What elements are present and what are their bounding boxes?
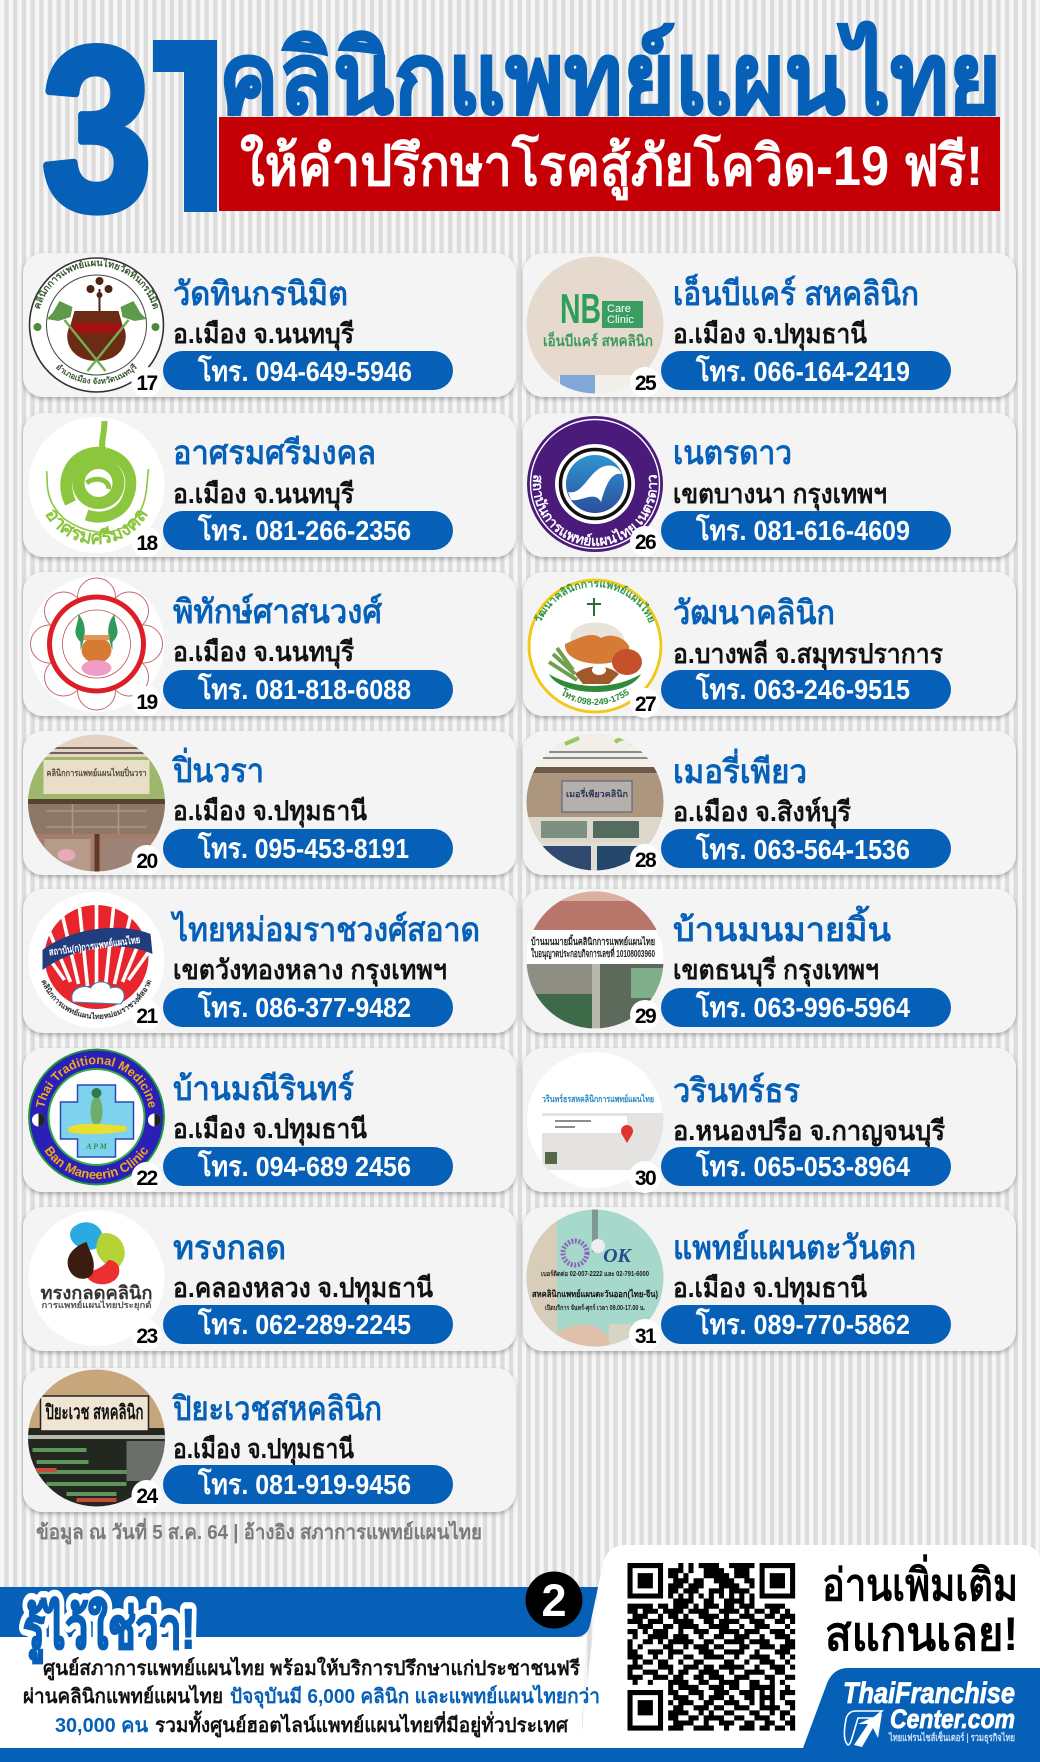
phone 21 xyxy=(163,988,453,1027)
badge 24: 24 xyxy=(136,1485,158,1508)
name 28: เมอรี่เพียว xyxy=(673,748,807,790)
phone 19 xyxy=(163,670,453,709)
phone 22 xyxy=(163,1147,453,1186)
badge 17: 17 xyxy=(136,372,157,395)
photo 24 xyxy=(28,1369,166,1510)
location 30: อ.หนองปรือ จ.กาญจนบุรี xyxy=(673,1116,945,1148)
logo 17: อำเภอเมือง จังหวัดนนทบุรี xyxy=(56,362,137,384)
phone 28: โทร. 063-564-1536 xyxy=(695,832,910,865)
badge 22: 22 xyxy=(136,1167,157,1190)
phone 26 xyxy=(661,511,951,550)
phone 29: โทร. 063-996-5964 xyxy=(695,990,910,1023)
photo 30: วรินทร์ธรสหคลินิกการแพทย์แผนไทย xyxy=(542,1093,654,1104)
body line 1: ศูนย์สภาการแพทย์แผนไทย พร้อมให้บริการปรึกษาแก่ประชาชนฟรี xyxy=(43,1656,580,1682)
name 23: ทรงกลด xyxy=(173,1229,286,1266)
phone 17 xyxy=(163,351,453,390)
name 29: บ้านมนมายมิ้น xyxy=(673,905,891,948)
phone 20 xyxy=(163,829,453,868)
red subtitle banner xyxy=(219,117,1000,211)
phone 18 xyxy=(163,511,453,550)
badge 25 xyxy=(630,367,660,397)
blue heading bar xyxy=(0,1587,598,1637)
body line 3: รวมทั้งศูนย์ฮอตไลน์แพทย์แผนไทยที่มีอยู่ทั่วประเทศ xyxy=(155,1710,569,1739)
title number 31: 3 xyxy=(42,0,152,259)
phone 24 xyxy=(163,1465,453,1504)
badge 2: 2 xyxy=(541,1575,567,1626)
phone 30 xyxy=(661,1147,951,1186)
name 20: ปิ่นวรา xyxy=(172,747,264,789)
body line 2: ปัจจุบันมี 6,000 คลินิก และแพทย์แผนไทยกว่า xyxy=(230,1684,600,1709)
logo 23: ทรงกลดคลินิก xyxy=(40,1283,153,1303)
icon: arrow xyxy=(844,1711,882,1747)
phone 25 xyxy=(661,351,951,390)
phone 18: โทร. 081-266-2356 xyxy=(197,513,411,546)
name 24: ปิยะเวชสหคลินิก xyxy=(172,1390,382,1427)
photo 24: ปิยะเวช สหคลินิก xyxy=(45,1402,144,1424)
name 19: พิทักษ์ศาสนวงศ์ xyxy=(173,593,383,630)
phone 25: โทร. 066-164-2419 xyxy=(695,354,910,387)
panel: clinic 18 xyxy=(20,412,518,562)
logo: ThaiFranchiseCenter xyxy=(803,1668,1040,1748)
badge 27: 27 xyxy=(635,693,656,716)
badge 30: 30 xyxy=(635,1167,656,1190)
panel: clinic 21 xyxy=(20,888,518,1038)
phone 30: โทร. 065-053-8964 xyxy=(695,1149,910,1182)
phone 24: โทร. 081-919-9456 xyxy=(197,1467,411,1500)
scan now heading: สแกนเลย! xyxy=(825,1607,1018,1660)
logo: ThaiFranchiseCenter: Center.com xyxy=(890,1704,1015,1734)
location 17: อ.เมือง จ.นนทบุรี xyxy=(173,319,354,351)
logo 21: สถาบัน(ก)การแพทย์แผนไทย xyxy=(48,933,141,958)
badge 21: 21 xyxy=(136,1005,158,1028)
photo 25: Clinic xyxy=(607,314,634,326)
photo 29 xyxy=(526,891,664,1030)
panel: clinic 28 xyxy=(523,731,1016,875)
logo 22: Ban Maneerin Clinic xyxy=(44,1146,148,1180)
bottom blue band xyxy=(0,1748,1040,1762)
panel: qr and scan prompt xyxy=(580,1545,1040,1748)
photo 25: NB xyxy=(560,285,601,332)
photo 31: สหคลินิกแพทย์แผนตะวันออก(ไทย-จีน) xyxy=(532,1288,658,1299)
body line 3: 30,000 คน xyxy=(55,1715,148,1737)
photo 28: เมอรี่เพียวคลินิก xyxy=(566,787,628,799)
logo 18: อาศรมศรีมงคล xyxy=(45,510,148,544)
location 28: อ.เมือง จ.สิงห์บุรี xyxy=(673,796,851,829)
body line 3 xyxy=(55,1710,569,1739)
location 23: อ.คลองหลวง จ.ปทุมธานี xyxy=(173,1273,433,1305)
location 21: เขตวังทองหลาง กรุงเทพฯ xyxy=(173,955,447,987)
photo 31 xyxy=(526,1209,664,1351)
logo 21 xyxy=(28,892,164,1030)
name 31: แพทย์แผนตะวันตก xyxy=(673,1229,916,1266)
name 18: อาศรมศรีมงคล xyxy=(173,434,376,471)
photo 31: เบอร์ติดต่อ 02-007-2222 และ 02-791-6000 xyxy=(541,1269,649,1278)
phone 22: โทร. 094-689 2456 xyxy=(197,1149,411,1182)
location 20: อ.เมือง จ.ปทุมธานี xyxy=(173,796,367,828)
QR code xyxy=(628,1566,795,1728)
location 24: อ.เมือง จ.ปทุมธานี xyxy=(173,1434,354,1466)
badge 27 xyxy=(630,688,660,718)
panel: clinic 20 xyxy=(23,731,516,875)
name 27: วัฒนาคลินิก xyxy=(673,594,835,631)
phone 26: โทร. 081-616-4609 xyxy=(695,513,910,546)
logo 19 xyxy=(28,576,164,716)
heading xyxy=(23,1596,195,1664)
name 21: ไทยหม่อมราชวงศ์สอาด xyxy=(170,910,480,948)
badge 28: 28 xyxy=(635,849,657,872)
logo 22: Thai Traditional Medicine xyxy=(36,1056,155,1108)
location 19: อ.เมือง จ.นนทบุรี xyxy=(173,637,354,669)
location 27: อ.บางพลี จ.สมุทรปราการ xyxy=(673,639,943,671)
phone 31 xyxy=(661,1305,951,1344)
location 18: อ.เมือง จ.นนทบุรี xyxy=(173,479,354,511)
body line 2 xyxy=(23,1684,600,1709)
panel: clinic 31 xyxy=(523,1207,1016,1351)
logo 27: โทร.098-249-1755 xyxy=(562,688,629,705)
panel: clinic 22 xyxy=(20,1048,518,1196)
badge 23: 23 xyxy=(136,1325,157,1348)
location 22: อ.เมือง จ.ปทุมธานี xyxy=(173,1114,367,1146)
location 26: เขตบางนา กรุงเทพฯ xyxy=(673,479,887,511)
logo 27: วัฒนาคลินิกการแพทย์แผนไทย xyxy=(534,581,655,623)
heading: รู้ไว้ใช่ว่า! xyxy=(23,1596,195,1664)
logo 26: สถาบันการแพทย์แผนไทย เนตรดาว xyxy=(532,475,658,546)
location 25: อ.เมือง จ.ปทุมธานี xyxy=(673,319,867,351)
badge 20 xyxy=(132,845,162,875)
photo 30 xyxy=(527,1052,664,1193)
badge 19: 19 xyxy=(136,691,157,714)
panel: clinic 23 xyxy=(23,1207,516,1351)
photo 31: เปิดบริการ จันทร์-ศุกร์ เวลา 09.00-17.00 น. xyxy=(545,1303,645,1312)
phone 28 xyxy=(661,829,951,868)
name 17: วัดทินกรนิมิต xyxy=(173,275,348,312)
logo 22: A P M xyxy=(85,1142,108,1151)
panel: clinic 27 xyxy=(520,572,1018,720)
phone 23 xyxy=(163,1305,453,1344)
body line 2: ผ่านคลินิกแพทย์แผนไทย xyxy=(23,1684,223,1708)
badge 18: 18 xyxy=(136,532,158,555)
name 30: วรินทร์ธร xyxy=(673,1072,800,1109)
text: 1 xyxy=(186,25,216,248)
red subtitle banner: ให้คำปรึกษาโรคสู้ภัยโควิด-19 ฟรี! xyxy=(240,133,983,201)
panel: clinic 30 xyxy=(523,1048,1016,1193)
logo 26 xyxy=(527,416,663,556)
logo 23: การแพทย์แผนไทยประยุกต์ xyxy=(42,1300,152,1311)
badge 20: 20 xyxy=(136,850,157,873)
panel: clinic 25 xyxy=(523,253,1016,397)
photo 25: เอ็นบีแคร์ สหคลินิก xyxy=(543,331,653,350)
name 25: เอ็นบีแคร์ สหคลินิก xyxy=(673,273,919,312)
photo 28 xyxy=(526,733,664,874)
badge 22 xyxy=(132,1162,162,1192)
panel: clinic 17 xyxy=(20,252,518,402)
badge 28 xyxy=(630,844,660,874)
logo 27 xyxy=(527,578,663,718)
phone 21: โทร. 086-377-9482 xyxy=(197,990,411,1023)
logo 21: คลินิกการแพทย์แผนไทยหม่อมราชวงศ์สอาด xyxy=(41,980,152,1020)
logo 18 xyxy=(28,417,164,557)
panel: clinic 19 xyxy=(23,572,516,716)
location 29: เขตธนบุรี กรุงเทพฯ xyxy=(673,955,879,987)
panel: clinic 26 xyxy=(520,412,1018,562)
badge 2 xyxy=(526,1572,582,1628)
badge 30 xyxy=(629,1161,661,1193)
panel: clinic 24 xyxy=(23,1368,516,1512)
photo 31: OK xyxy=(603,1245,633,1267)
badge 24 xyxy=(132,1480,162,1510)
photo 25 xyxy=(526,256,664,397)
location 31: อ.เมือง จ.ปทุมธานี xyxy=(673,1273,867,1305)
phone 29 xyxy=(661,988,951,1027)
badge 31: 31 xyxy=(635,1325,657,1348)
photo 29: บ้านมนมายมิ้นคลินิกการแพทย์แผนไทย xyxy=(531,934,655,948)
logo 17: คลินิกการแพทย์แผนไทยวัดทินกรนิมิต xyxy=(35,258,158,310)
badge 26: 26 xyxy=(635,531,656,554)
name 22: บ้านมณีรินทร์ xyxy=(173,1070,354,1107)
phone 23: โทร. 062-289-2245 xyxy=(197,1307,411,1340)
phone 20: โทร. 095-453-8191 xyxy=(197,831,409,864)
badge 31 xyxy=(629,1319,661,1351)
heading: รู้ไว้ใช่ว่า! xyxy=(23,1596,195,1664)
panel: clinic 29 xyxy=(523,889,1016,1033)
phone 19: โทร. 081-818-6088 xyxy=(197,672,411,705)
phone 31: โทร. 089-770-5862 xyxy=(695,1307,910,1340)
logo 17 xyxy=(28,257,164,397)
photo 25: Care xyxy=(607,303,631,315)
logo 22 xyxy=(28,1048,165,1192)
phone 27 xyxy=(661,670,951,709)
name 26: เนตรดาว xyxy=(673,434,792,471)
logo 23 xyxy=(28,1210,164,1350)
phone 27: โทร. 063-246-9515 xyxy=(695,672,910,705)
photo 20 xyxy=(28,734,166,875)
source note: ข้อมูล ณ วันที่ 5 ส.ค. 64 | อ้างอิง สภาการแพทย์แผนไทย xyxy=(36,1517,482,1546)
footer panel: did you know xyxy=(0,1572,600,1748)
photo 29: ใบอนุญาตประกอบกิจการเลขที่ 10108003960 xyxy=(531,946,655,960)
phone 17: โทร. 094-649-5946 xyxy=(197,354,412,387)
photo 20: คลินิกการแพทย์แผนไทยปิ่นวรา xyxy=(46,766,146,778)
badge 25: 25 xyxy=(635,372,657,395)
badge 29: 29 xyxy=(635,1005,656,1028)
